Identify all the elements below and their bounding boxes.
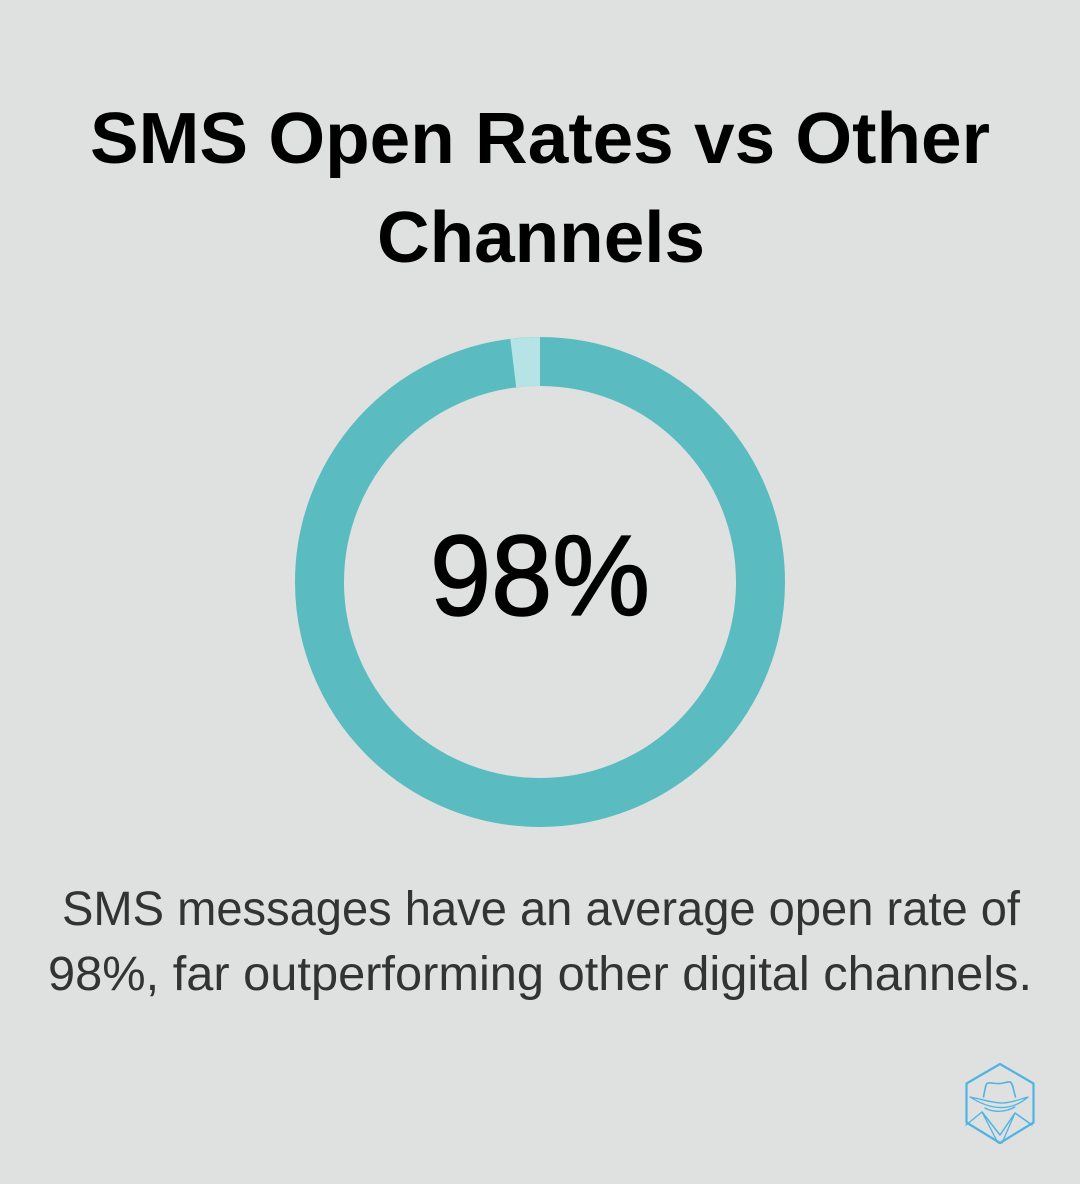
donut chart: 98% — [320, 337, 760, 802]
center value: 98% — [430, 513, 650, 640]
title — [90, 99, 990, 278]
icon: logo, hat and coat in hexagon — [966, 1064, 1034, 1143]
title: Channels — [377, 198, 705, 278]
description: 98%, far outperforming other digital channels. — [48, 948, 1032, 1001]
description — [48, 883, 1032, 1001]
title: SMS Open Rates vs Other — [90, 99, 990, 179]
description: SMS messages have an average open rate of — [62, 883, 1021, 936]
